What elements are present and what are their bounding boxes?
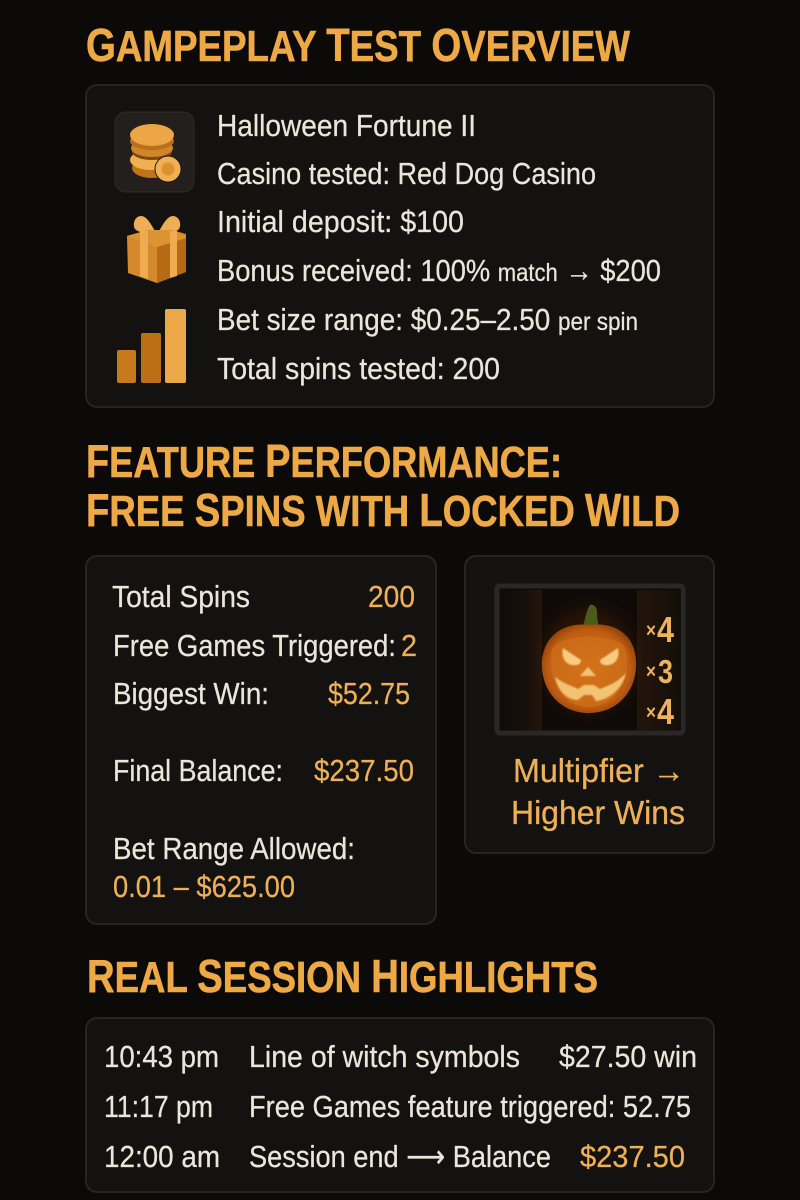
text: test details: Halloween Fortune II bbox=[217, 108, 476, 143]
icon: coin stack bbox=[115, 112, 194, 192]
panel: session timeline: $27.50 win bbox=[559, 1039, 697, 1074]
text: multipliers: 3 bbox=[658, 653, 673, 690]
panel: session timeline: 10:43 pm bbox=[104, 1039, 219, 1074]
panel: session stats: $52.75 bbox=[328, 676, 410, 711]
text: test details: Total spins tested: 200 bbox=[217, 351, 500, 386]
text: test details: Bet size range: $0.25–2.50 per spin bbox=[217, 302, 638, 337]
panel: session timeline bbox=[86, 1018, 714, 1192]
text: multipliers: 4 bbox=[657, 609, 674, 650]
heading: real session highlights: REAL SESSION HIGHLIGHTS bbox=[87, 950, 598, 1002]
text: multipliers: × bbox=[646, 661, 656, 683]
panel: session timeline: Session end ⟶ Balance bbox=[249, 1139, 551, 1174]
text: test details bbox=[217, 108, 661, 386]
text: multipliers: 4 bbox=[657, 691, 674, 732]
heading: gameplay test overview: GAMPEPLAY TEST OVERVIEW bbox=[86, 19, 630, 71]
heading: feature performance bbox=[86, 435, 680, 536]
panel: session stats: 0.01 – $625.00 bbox=[113, 869, 295, 904]
text: test details: Initial deposit: $100 bbox=[217, 204, 464, 239]
panel: session timeline: 12:00 am bbox=[104, 1139, 220, 1174]
heading: feature performance: FEATURE PERFORMANCE: bbox=[86, 435, 562, 487]
heading: feature performance: FREE SPINS WITH LOCKED WILD bbox=[86, 484, 680, 536]
text: test details: Casino tested: Red Dog Casino bbox=[217, 156, 596, 191]
text: multiplier caption: Higher Wins bbox=[511, 794, 685, 831]
icon: gift box bbox=[127, 216, 186, 283]
panel: session timeline: $237.50 bbox=[580, 1139, 685, 1174]
text: multipliers: × bbox=[646, 702, 656, 724]
text: multiplier caption bbox=[511, 752, 685, 831]
panel: session timeline: 11:17 pm bbox=[104, 1089, 213, 1124]
text: multipliers: × bbox=[646, 620, 656, 642]
text: multipliers bbox=[646, 609, 674, 732]
panel: session stats: 2 bbox=[401, 628, 417, 663]
panel: session stats: Total Spins bbox=[112, 579, 250, 614]
panel: session stats: Bet Range Allowed: bbox=[113, 831, 355, 866]
panel: session stats: Free Games Triggered: bbox=[113, 628, 396, 663]
panel: session timeline: Free Games feature triggered: 52.75 bbox=[249, 1089, 691, 1124]
panel: session stats: $237.50 bbox=[314, 753, 414, 788]
panel: session stats bbox=[86, 556, 436, 924]
text: test details: Bonus received: 100% match → $200 bbox=[217, 253, 661, 288]
icon: bar chart bbox=[117, 309, 186, 383]
panel: session stats: 200 bbox=[368, 579, 415, 614]
panel: multiplier bbox=[465, 556, 714, 853]
text: multiplier caption: Multipfier → bbox=[513, 752, 685, 789]
image: pumpkin reel bbox=[497, 586, 683, 733]
panel: session timeline: Line of witch symbols bbox=[249, 1039, 520, 1074]
panel: session stats: Final Balance: bbox=[113, 753, 283, 788]
icon: pumpkin bbox=[542, 605, 636, 713]
panel: session stats: Biggest Win: bbox=[113, 676, 269, 711]
panel: test overview bbox=[86, 85, 714, 407]
